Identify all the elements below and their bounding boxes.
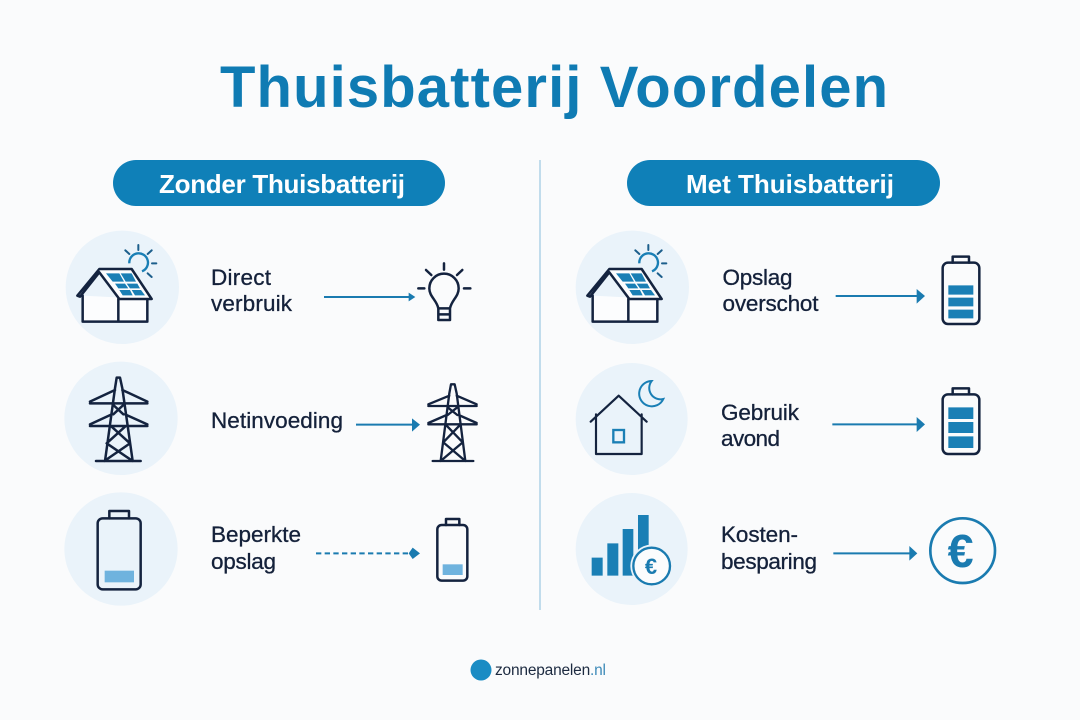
- panel: met thuisbatterij: [576, 160, 995, 605]
- footer logo: zonnepanelen.nl: [495, 662, 606, 679]
- label: opslag overschot: overschot: [722, 291, 819, 316]
- row: netinvoeding: [64, 362, 477, 475]
- icon: euro circle: €: [948, 525, 974, 577]
- icon: light bulb: [418, 263, 470, 320]
- label: opslag overschot: [722, 265, 819, 316]
- label: kosten-besparing: Kosten-: [721, 522, 798, 547]
- panel: zonder thuisbatterij: [64, 160, 477, 606]
- heading pill: met: Met Thuisbatterij: [686, 169, 894, 199]
- label: direct verbruik: verbruik: [211, 291, 293, 316]
- label: beperkte opslag: [211, 522, 301, 574]
- arrow: [836, 289, 925, 304]
- footer logo: [470, 660, 606, 680]
- dashed arrow: [316, 548, 420, 559]
- arrow: [832, 417, 925, 432]
- heading pill: zonder: Zonder Thuisbatterij: [159, 169, 405, 199]
- row: kostenbesparing: [576, 493, 995, 605]
- arrow: [356, 418, 420, 432]
- arrow: [324, 293, 415, 301]
- row: opslag overschot: [576, 231, 979, 344]
- heading pill: met: [627, 160, 940, 206]
- label: gebruik avond: Gebruik: [721, 400, 800, 425]
- label: direct verbruik: [211, 265, 293, 316]
- icon: battery charged: [943, 257, 979, 324]
- icon: house with moon: [576, 363, 688, 475]
- icon: nearly empty battery: [64, 492, 178, 606]
- heading pill: zonder: [113, 160, 445, 206]
- label: beperkte opslag: Beperkte: [211, 522, 301, 547]
- row: gebruik avond: [576, 363, 979, 475]
- row: beperkte opslag: [64, 492, 467, 606]
- row: direct verbruik: [66, 231, 470, 344]
- label: direct verbruik: Direct: [211, 265, 272, 290]
- label: opslag overschot: Opslag: [722, 265, 792, 290]
- label: kosten-besparing: besparing: [721, 549, 817, 574]
- icon: house with solar panels: [66, 231, 179, 344]
- label: netinvoeding: Netinvoeding: [211, 408, 343, 433]
- icon: bars with euro coin: €: [645, 554, 657, 579]
- icon: power tower: [64, 362, 178, 475]
- arrow: [833, 546, 917, 561]
- label: kosten-besparing: [721, 522, 817, 574]
- label: gebruik avond: avond: [721, 426, 780, 451]
- icon: small power tower: [428, 384, 477, 461]
- icon: euro circle: [930, 518, 995, 583]
- label: gebruik avond: [721, 400, 800, 451]
- icon: small nearly empty battery: [437, 519, 467, 581]
- divider: [539, 160, 541, 610]
- title: Thuisbatterij Voordelen: [220, 55, 888, 120]
- label: beperkte opslag: opslag: [211, 549, 276, 574]
- icon: bars with euro coin: [576, 493, 688, 605]
- icon: house with solar panels: [576, 231, 689, 344]
- icon: battery full: [943, 388, 979, 454]
